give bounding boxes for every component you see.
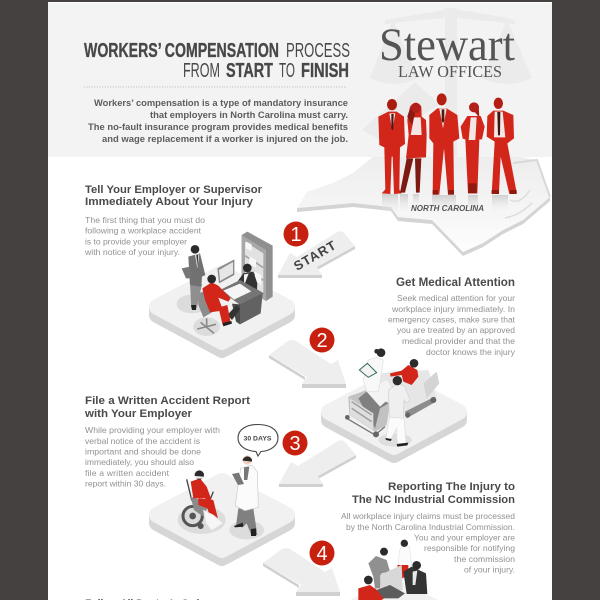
- step 4 heading: The NC Industrial Commission: [352, 494, 515, 506]
- person 1: [378, 99, 405, 194]
- speech bubble: 30 days: 30 DAYS: [244, 436, 272, 442]
- step 2 heading: Get Medical Attention: [396, 277, 515, 289]
- step 2 illustration: hospital: [345, 348, 439, 447]
- badge 3: 3: [289, 433, 301, 455]
- floor reflections under team: [382, 194, 508, 215]
- badge 1: [284, 222, 308, 246]
- step 4 text: by the North Carolina Industrial Commission.: [346, 522, 515, 532]
- title: PROCESS: [286, 40, 350, 62]
- person 4: [461, 102, 485, 193]
- step 3 platform: [149, 481, 295, 558]
- step 1 text: The first thing that you must do: [85, 215, 205, 225]
- header band: [48, 3, 552, 157]
- step 3 heading: File a Written Accident Report: [85, 395, 250, 407]
- step 3 text: immediately, you should also: [85, 457, 194, 467]
- badge 4: [310, 540, 334, 566]
- step 1 illustration: office: [177, 232, 273, 336]
- title: TO: [279, 60, 295, 82]
- arrow 3: [279, 440, 356, 487]
- step 1 text: [84, 215, 205, 257]
- step 1 text: is to provide your employer: [85, 236, 187, 246]
- step 3 text: verbal notice of the accident is: [85, 436, 200, 446]
- intro paragraph: and wage replacement if a worker is injured on the job.: [102, 134, 348, 144]
- step 4 illustration: meeting: [358, 540, 427, 600]
- badge 4: 4: [316, 543, 328, 565]
- start label: START: [291, 238, 338, 274]
- step 4 text: [341, 511, 515, 574]
- speech bubble: 30 days: [238, 424, 278, 456]
- step 3 heading: [84, 395, 250, 420]
- title: FROM: [183, 60, 220, 82]
- person 5: [487, 98, 517, 194]
- step 4 text: All workplace injury claims must be processed: [341, 511, 515, 521]
- step 2 text: medical provider and that the: [402, 336, 515, 346]
- step 1 platform: [149, 273, 295, 350]
- step 1 heading: [85, 184, 263, 208]
- step 2 platform: [321, 378, 467, 455]
- step 1 text: following a workplace accident: [85, 226, 202, 236]
- step 2 text: [388, 293, 516, 357]
- team of red silhouettes: [378, 93, 517, 195]
- title: [84, 40, 350, 82]
- step 1 heading: Tell Your Employer or Supervisor: [85, 184, 263, 196]
- intro paragraph: The no-fault insurance program provides medical benefits: [88, 122, 348, 132]
- logo: Stewart Law Offices: Stewart: [379, 19, 515, 71]
- step 3 text: While providing your employer with: [85, 425, 220, 435]
- step 4 heading: [352, 481, 515, 506]
- step 4 text: responsible for notifying: [424, 543, 515, 553]
- person 2: [400, 103, 427, 193]
- arrow 2: [269, 340, 346, 388]
- map label: NORTH CAROLINA: [411, 203, 484, 213]
- step 3 text: report within 30 days.: [85, 478, 166, 488]
- step 3 text: file a written accident: [85, 468, 170, 478]
- North Carolina map: [297, 157, 550, 256]
- badge 1: 1: [290, 224, 302, 246]
- step 2 text: doctor knows the injury: [426, 347, 516, 357]
- step 3 heading: with Your Employer: [84, 408, 193, 420]
- step 4 heading: Reporting The Injury to: [388, 481, 515, 493]
- intro paragraph: Workers’ compensation is a type of mandatory insurance: [94, 98, 348, 108]
- badge 2: [310, 328, 334, 352]
- title: START: [226, 60, 273, 82]
- step 3 text: [85, 425, 220, 488]
- title: WORKERS’ COMPENSATION: [84, 40, 279, 62]
- step 2 text: workplace injury immediately. In: [391, 304, 515, 314]
- step 3 illustration: doctor and wheelchair patient: [178, 455, 264, 539]
- intro paragraph: that employers in North Carolina must carry.: [150, 110, 348, 120]
- arrow 4: [263, 548, 340, 596]
- step 2 text: you are treated by an approved: [397, 325, 515, 335]
- person 3: [429, 93, 459, 195]
- intro paragraph: [84, 87, 348, 144]
- badge 2: 2: [316, 330, 328, 352]
- step 4 platform: [350, 580, 438, 600]
- badge 3: [282, 430, 308, 456]
- step 2 text: Seek medical attention for your: [397, 293, 515, 303]
- logo: Stewart Law Offices: LAW OFFICES: [398, 62, 502, 81]
- step 1 text: with notice of your injury.: [84, 247, 180, 257]
- step 4 text: the commission: [454, 554, 515, 564]
- step 2 text: emergency cases, make sure that: [388, 314, 516, 324]
- title: FINISH: [301, 60, 349, 82]
- step 4 text: of your injury.: [464, 564, 515, 574]
- step 3 text: important and should be done: [85, 446, 201, 456]
- arrow 1: start: [278, 231, 355, 278]
- step 4 text: You and your employer are: [414, 532, 515, 542]
- step 1 heading: Immediately About Your Injury: [85, 196, 254, 208]
- background scales of justice: [362, 8, 532, 157]
